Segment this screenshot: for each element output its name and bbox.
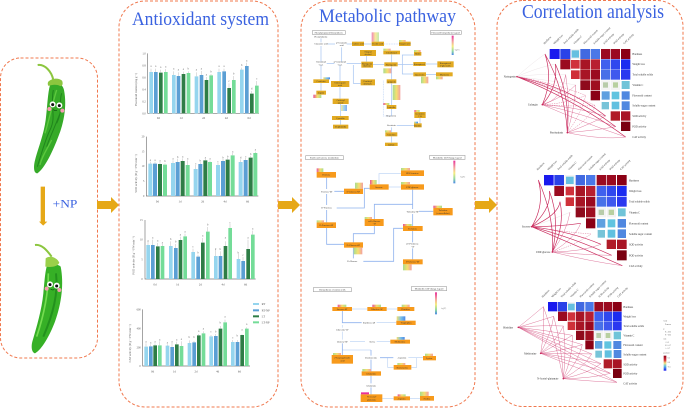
pathway: starch and sucrose metabolism: Trehalose-6P	[406, 210, 420, 213]
chart: amino acid correlation network: Soluble sugar content	[623, 354, 647, 357]
arrow: treatment down	[39, 187, 47, 226]
heatmap: middle correlation matrix	[544, 175, 627, 260]
chart: sugar correlation network: CAT activity	[629, 265, 643, 268]
pathway: flavonoid biosynthesis: Flavonoid biosynthesis legend	[432, 31, 461, 34]
pathway: flavonoid biosynthesis: Caffeoyl	[337, 99, 345, 102]
chart: CAT activity: aaaaaaaabbaacbbacbaa	[145, 316, 248, 345]
pathway: starch and sucrose metabolism: D-Glucose-6P	[347, 190, 361, 193]
pathway: flavonoid biosynthesis: Hesperetin	[386, 115, 397, 118]
pathway: starch and sucrose metabolism: β-D-Glucose	[407, 242, 419, 245]
chart: flavonoid content: 6d	[248, 116, 251, 120]
chart: amino acid correlation network: Histidine	[503, 326, 514, 329]
pathway: flavonoid biosynthesis: Daidzin	[414, 124, 422, 127]
chart: POD activity: 2d	[199, 282, 202, 286]
pathway: biosynthesis of amino acids: Acid	[340, 360, 345, 363]
chart: POD activity: 6d	[244, 282, 248, 286]
chart: SOD activity: 5	[143, 180, 145, 183]
pathway: flavonoid biosynthesis: Genistein	[387, 124, 397, 127]
chart: flavonoid correlation network: Galangin	[528, 104, 538, 107]
chart: flavonoid content: 0.8	[142, 64, 146, 67]
panel: antioxidant system	[119, 1, 278, 407]
chart: flavonoid content: 0d	[157, 116, 160, 120]
chart: amino acid correlation network: Hardness	[541, 289, 550, 298]
panel: correlation analysis	[497, 0, 683, 406]
pathway: starch and sucrose metabolism: -1P	[411, 246, 415, 249]
pathway: flavonoid biosynthesis: alcohol	[365, 53, 372, 56]
pathway: flavonoid biosynthesis: Cinnamic acid	[314, 43, 329, 46]
pathway: biosynthesis of amino acids: Glycerate-3P	[336, 328, 349, 331]
legend: correlation key: 0.5	[668, 357, 670, 359]
pathway: starch and sucrose metabolism: Fructose	[322, 174, 330, 177]
pathway: flavonoid biosynthesis: 3-glucoside	[440, 64, 451, 67]
chart: x labels for SOD: 2d	[201, 200, 205, 204]
arrow: to metabolic pathway	[278, 197, 300, 213]
chart: amino acid correlation network: POD activity	[623, 373, 638, 376]
pathway: biosynthesis of amino acids: Aspartate	[398, 357, 406, 360]
pathway: flavonoid biosynthesis: CoA	[338, 63, 343, 66]
pathway: biosynthesis of amino acids: Proline	[424, 397, 430, 400]
chart: flavonoid content: 4d	[225, 116, 228, 120]
chart: amino acid correlation network: SOD activity	[598, 286, 610, 298]
pathway: flavonoid biosynthesis: aldehyde	[363, 82, 372, 85]
pathway: biosynthesis of amino acids: Biosynthesis of amino acids	[319, 289, 346, 292]
chart: SOD activity: SOD activity (U g⁻¹ FW min⁻¹)	[134, 154, 138, 193]
pathway: starch and sucrose metabolism	[306, 155, 466, 270]
chart: x labels for SOD: 0d	[156, 200, 159, 204]
legend: correlation key: >= 0.7	[665, 347, 670, 350]
chart: x labels for SOD	[156, 200, 250, 204]
chart: SOD activity: 10	[142, 165, 145, 168]
chart: x labels for SOD: 4d	[224, 200, 227, 204]
pathway: starch and sucrose metabolism: α-D-Glucose	[368, 220, 380, 223]
pathway: biosynthesis of amino acids: Metabolite fold-change legend	[415, 288, 444, 291]
network: amino acid links	[517, 307, 617, 382]
chart: POD activity: 0d	[154, 282, 157, 286]
pathway: flavonoid biosynthesis: p-Coumaric	[336, 41, 347, 44]
chart: x labels for SOD: 1d	[179, 200, 182, 204]
chart: amino acid correlation network: Weight loss	[623, 315, 636, 318]
chart: sugar correlation network: Flavonoid content	[578, 155, 594, 171]
chart: sugar correlation network: POD activity	[609, 159, 621, 171]
chart: amino acid correlation network: Hardness	[623, 306, 633, 309]
legend: correlation key: -0.5	[668, 367, 671, 369]
chart: flavonoid correlation network: SOD activity	[603, 33, 615, 45]
label: +NP: +NP	[53, 197, 78, 211]
chart: amino acid correlation network: Soluble sugar content	[589, 280, 607, 298]
chart: amino acid correlation network: Total soluble solids	[560, 282, 577, 298]
chart: POD activity: 1d	[176, 282, 180, 286]
pathway: biosynthesis of amino acids: Glutamine	[366, 372, 376, 375]
chart: sugar correlation network: Flavonoid content	[629, 222, 649, 225]
chart: CAT activity	[128, 308, 250, 373]
pathway: flavonoid biosynthesis: Ferulic acid	[372, 43, 384, 46]
chart: POD activity: 10	[140, 239, 143, 242]
heading: antioxidant system: Antioxidant system	[132, 9, 269, 30]
chart: CAT activity: 600	[137, 308, 141, 311]
pathway: flavonoid biosynthesis: Cinnamoyl	[316, 61, 327, 64]
heading: metabolic pathway: Metabolic pathway	[319, 6, 456, 27]
pathway: flavonoid biosynthesis: Myricetin	[440, 73, 450, 76]
pathway: starch and sucrose metabolism: Sucrose	[375, 186, 383, 189]
pathway: flavonoid biosynthesis: Cyanidin	[336, 117, 345, 120]
chart: CAT activity: 0	[139, 365, 141, 368]
chart: POD activity: 4d	[222, 282, 225, 286]
pathway: flavonoid biosynthesis: Genistein	[416, 113, 425, 116]
chart: amino acid correlation network: Flavonoid content	[623, 344, 643, 347]
legend: correlation key: Code	[663, 321, 667, 323]
chart: CAT activity: 4d	[216, 369, 220, 373]
chart: CAT activity: CAT activity (U g⁻¹ FW min⁻¹)	[128, 324, 132, 362]
chart: flavonoid correlation network: Total soluble solids	[632, 74, 653, 77]
pathway: starch and sucrose metabolism: D-Glucose-6P	[347, 244, 361, 247]
chart: SOD activity: 20	[142, 136, 145, 139]
chart: POD activity: aaaabbaacbabcbacbcaa	[147, 221, 254, 257]
pathway: flavonoid biosynthesis: acid	[340, 44, 344, 47]
pathway: flavonoid biosynthesis: Naringenin	[386, 63, 397, 66]
heatmap: top correlation matrix	[550, 49, 630, 131]
legend: treatments: LT	[262, 314, 265, 318]
chart: sugar correlation network: SOD activity	[629, 244, 644, 247]
pathway: flavonoid biosynthesis: Eriodictyol	[386, 51, 397, 54]
chart: flavonoid content: Flavonoid content (mg g⁻¹)	[134, 73, 138, 106]
pathway: biosynthesis of amino acids: Glutamate	[366, 384, 376, 387]
chart: POD activity	[132, 219, 256, 286]
chart: sugar correlation network: UDP-glucose	[536, 251, 551, 254]
pathway: flavonoid biosynthesis: Phenylpropanoid biosynthesis	[315, 31, 343, 34]
chart: sugar correlation network: Hardness	[536, 162, 545, 171]
chart: POD activity: POD activity (U g⁻¹ FW min⁻¹)	[132, 236, 136, 275]
network: sugar links	[531, 180, 622, 266]
pathway: biosynthesis of amino acids: Methionine	[395, 341, 405, 344]
chart: amino acid correlation network: Methionine	[524, 352, 537, 355]
chart: flavonoid correlation network: Naringenin	[504, 76, 516, 79]
chart: sugar correlation network: Soluble sugar content	[629, 233, 652, 236]
pathway: flavonoid biosynthesis: Naringenin	[362, 62, 373, 65]
chart: flavonoid content: 0.2	[142, 100, 146, 103]
pathway: biosynthesis of amino acids: Tryptophan	[401, 322, 412, 325]
pathway: starch and sucrose metabolism: D-Fructose	[321, 206, 332, 209]
pathway: starch and sucrose metabolism: -1P	[373, 223, 377, 226]
pathway: flavonoid biosynthesis: Rutin	[415, 53, 421, 56]
chart: amino acid correlation network: POD activity	[607, 286, 620, 298]
pathway: biosynthesis of amino acids: Sucrose-6P	[337, 308, 348, 311]
pathway: starch and sucrose metabolism: Fructose-6P	[321, 190, 333, 193]
pathway: biosynthesis of amino acids: Homoserine	[397, 366, 408, 369]
pathway: flavonoid biosynthesis: Delphinidin	[335, 126, 347, 129]
pathway: flavonoid biosynthesis: Phenylalanine	[314, 35, 328, 38]
pathway: flavonoid biosynthesis: 7-O	[418, 115, 422, 118]
chart: POD activity: 15	[140, 219, 143, 222]
heatmap: bottom correlation matrix	[548, 302, 622, 378]
chart: POD activity: 5	[141, 258, 143, 261]
chart: flavonoid correlation network: Pinobanksin	[550, 132, 564, 135]
chart: sugar correlation network: Total soluble solids	[629, 201, 650, 204]
chart: flavonoid correlation network: Soluble sugar content	[632, 105, 656, 108]
legend: correlation key	[663, 321, 671, 371]
pathway: flavonoid biosynthesis: p-Coumaroyl	[334, 61, 347, 64]
chart: flavonoid correlation network: Vitamin C	[573, 35, 583, 45]
chart: amino acid correlation network: Flavonoid content	[579, 282, 595, 298]
pathway: biosynthesis of amino acids: Erythrose-4P	[363, 322, 376, 325]
pathway: flavonoid biosynthesis: Gallate	[388, 143, 395, 146]
chart: flavonoid correlation network: CAT activity	[632, 136, 647, 139]
chart: sugar correlation network: Vitamin C	[629, 211, 640, 214]
chart: flavonoid content: 0.0	[142, 112, 146, 115]
chart: flavonoid content: 1d	[180, 116, 183, 120]
legend: correlation key: Pearson	[665, 324, 671, 326]
chart: amino acid correlation network: N-Acetyl-glutamate	[537, 378, 559, 381]
chart: SOD activity: aaababaacbaacbbadcba	[150, 148, 257, 165]
pathway: flavonoid biosynthesis: Chlorogenic	[334, 82, 346, 85]
chart: sugar correlation network: SOD activity	[599, 159, 611, 171]
pathway: flavonoid biosynthesis: Catechin	[387, 133, 396, 136]
chart: flavonoid content: 1.0	[142, 52, 146, 55]
chart: flavonoid correlation network: SOD activity	[632, 115, 647, 118]
chart: flavonoid correlation network: Vitamin C	[632, 84, 644, 87]
legend: correlation key: cofe	[663, 338, 667, 341]
chart: flavonoid correlation network: Total soluble solids	[563, 28, 580, 45]
arrow: to correlation analysis	[475, 197, 497, 213]
legend: correlation key: P ≤ 0.05	[665, 330, 671, 333]
pathway: flavonoid biosynthesis: Caffeic acid	[352, 43, 364, 46]
pathway: flavonoid biosynthesis: Luteolin	[387, 106, 396, 109]
pathway: flavonoid biosynthesis: Sinapic acid	[399, 43, 411, 46]
pathway: flavonoid biosynthesis: Sinapyl	[364, 51, 372, 54]
pathway: starch and sucrose metabolism: Trehalose	[438, 209, 448, 212]
pathway: flavonoid biosynthesis: Kaempferol	[440, 62, 451, 65]
chart: sugar correlation network: Vitamin C	[568, 161, 578, 171]
pathway: biosynthesis of amino acids: Serine	[369, 340, 375, 343]
chart: amino acid correlation network	[503, 280, 671, 385]
legend: correlation key: p	[663, 328, 664, 330]
pathway: flavonoid biosynthesis	[312, 31, 461, 146]
chart: flavonoid content: 0.4	[142, 88, 146, 91]
network: metabolite links	[516, 54, 626, 138]
pathway: flavonoid biosynthesis: Lignin	[318, 92, 325, 95]
pathway: starch and sucrose metabolism: D-Glucose-6P	[406, 261, 420, 264]
pathway: starch and sucrose metabolism: Metabolite fold-change legend	[433, 156, 462, 159]
panel: metabolic pathway	[301, 1, 475, 407]
pathway: flavonoid biosynthesis: quinic	[338, 101, 344, 104]
chart: flavonoid content: 2d	[202, 116, 206, 120]
pathway: flavonoid biosynthesis: CoA	[319, 63, 324, 66]
icon: pepper after treatment	[32, 245, 62, 353]
chart: CAT activity: 400	[137, 327, 141, 330]
pathway: flavonoid biosynthesis: -log(FC)	[454, 49, 460, 52]
arrow: to antioxidant system	[97, 197, 119, 213]
chart: amino acid correlation network: Vitamin C	[623, 335, 635, 338]
chart: CAT activity: 1d	[173, 369, 176, 373]
pathway: starch and sucrose metabolism: D-Fructose-6P	[319, 224, 334, 227]
chart: flavonoid correlation network: Hardness	[543, 36, 552, 45]
pathway: starch and sucrose metabolism: UDP-fructose	[406, 172, 419, 175]
chart: SOD activity	[134, 136, 258, 198]
chart: sugar correlation network: Hardness	[629, 179, 639, 182]
pathway: flavonoid biosynthesis: Quercetin	[415, 73, 425, 76]
chart: SOD activity: 15	[142, 150, 145, 153]
pathway: flavonoid biosynthesis: Kaempferol	[414, 63, 425, 66]
chart: flavonoid correlation network: POD activity	[632, 126, 647, 129]
chart: sugar correlation network: Total soluble solids	[557, 154, 574, 171]
chart: flavonoid content: aaaaaaabaaabaacbbadc	[150, 59, 258, 90]
chart: flavonoid correlation network: CAT activity	[623, 33, 635, 45]
chart: amino acid correlation network: Vitamin C	[570, 288, 580, 298]
chart: amino acid correlation network: CAT activity	[617, 286, 629, 298]
pathway: flavonoid biosynthesis: Coniferyl	[363, 80, 372, 83]
pathway: biosynthesis of amino acids: N-Acetyl-	[367, 396, 377, 399]
pathway: biosynthesis of amino acids: glutamate	[367, 399, 376, 402]
chart: CAT activity: 200	[137, 346, 141, 349]
pathway: flavonoid biosynthesis: chalcone	[363, 65, 371, 68]
pathway: biosynthesis of amino acids: Lysine	[426, 357, 432, 360]
legend: correlation key: pearson r	[663, 353, 670, 355]
chart: sugar correlation network: POD activity	[629, 254, 644, 257]
chart: SOD activity: 0	[143, 195, 145, 198]
chart: flavonoid correlation network: Flavonoid content	[632, 94, 652, 97]
legend: correlation key: 0.0	[668, 362, 670, 364]
chart: sugar correlation network: CAT activity	[620, 159, 632, 171]
chart: amino acid correlation network: Weight loss	[551, 287, 562, 298]
panel: pepper treatment	[0, 58, 98, 358]
pathway: biosynthesis of amino acids: 2-Isopropylmalic	[334, 357, 350, 360]
pathway: biosynthesis of amino acids: -log(FC)	[441, 307, 447, 310]
chart: amino acid correlation network: CAT activity	[623, 382, 638, 385]
chart: sugar correlation network: Sucrose	[522, 226, 531, 229]
pathway: starch and sucrose metabolism: Starch and sucrose metabolism	[310, 157, 339, 160]
chart: flavonoid correlation network	[504, 26, 656, 139]
chart: sugar correlation network	[522, 152, 652, 268]
legend: treatments: RT-NP	[262, 308, 270, 312]
chart: sugar correlation network: Weight loss	[629, 190, 641, 193]
heading: correlation analysis: Correlation analysis	[522, 2, 664, 23]
chart: sugar correlation network: Weight loss	[547, 160, 558, 171]
chart: CAT activity: 2d	[195, 369, 198, 373]
legend: correlation key: P > 0.05	[665, 333, 671, 336]
pathway: starch and sucrose metabolism: (extracellular)	[436, 212, 450, 215]
chart: flavonoid correlation network: Soluble sugar content	[593, 26, 611, 45]
chart: x labels for SOD: 6d	[246, 200, 250, 204]
chart: sugar correlation network: Soluble sugar content	[588, 152, 607, 171]
chart: flavonoid content: 0.6	[142, 76, 146, 79]
chart: flavonoid correlation network: Weight loss	[553, 34, 564, 45]
pathway: starch and sucrose metabolism: UDP-glucose	[406, 186, 419, 189]
pathway: biosynthesis of amino acids	[313, 287, 447, 402]
pathway: flavonoid biosynthesis: Coniferin	[317, 80, 326, 83]
pathway: starch and sucrose metabolism: D-Glucose	[347, 260, 357, 263]
chart: flavonoid correlation network: POD activity	[613, 33, 625, 45]
chart: flavonoid correlation network: Weight loss	[632, 63, 645, 66]
legend: treatments: RT	[262, 302, 265, 306]
pathway: flavonoid biosynthesis: acid	[338, 84, 343, 87]
chart: CAT activity: 6d	[238, 369, 241, 373]
chart: flavonoid content	[134, 52, 259, 120]
chart: flavonoid correlation network: Hardness	[632, 53, 642, 56]
chart: CAT activity: 0d	[151, 369, 155, 373]
legend: treatments	[253, 302, 270, 324]
chart: POD activity: 0	[141, 278, 143, 281]
pathway: flavonoid biosynthesis: Apigenin	[387, 80, 396, 83]
pathway: starch and sucrose metabolism: -log(FC)	[460, 176, 466, 179]
pathway: biosynthesis of amino acids: Histidine	[401, 308, 410, 311]
pathway: biosynthesis of amino acids: Glucose-6P	[337, 340, 348, 343]
legend: treatments: LT-NP	[262, 320, 270, 324]
pathway: biosynthesis of amino acids: Ribulose-5P	[371, 308, 383, 311]
chart: amino acid correlation network: Total soluble solids	[623, 325, 644, 328]
chart: flavonoid correlation network: Flavonoid content	[583, 29, 599, 45]
chart: amino acid correlation network: SOD activity	[623, 363, 638, 366]
legend: correlation key: 0.3 - 0.7	[665, 345, 671, 347]
icon: pepper before treatment	[34, 65, 65, 173]
legend: correlation key: < 0.3	[665, 341, 669, 344]
pathway: starch and sucrose metabolism: Trehalose	[408, 227, 417, 230]
pathway: biosynthesis of amino acids: Oxaloacetate	[365, 357, 377, 360]
pathway: biosynthesis of amino acids: Arginine	[398, 397, 406, 400]
